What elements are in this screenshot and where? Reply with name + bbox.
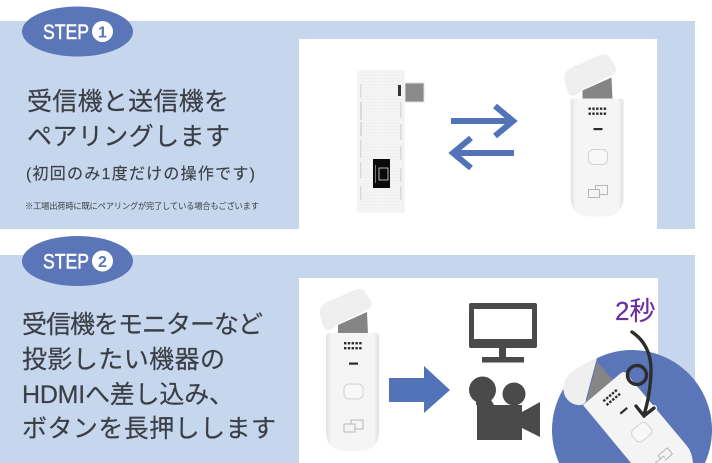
heading: step 1 — [27, 88, 230, 151]
panel: step 1 background — [0, 21, 695, 229]
callout: button press circle — [552, 350, 712, 463]
badge: step 1 — [22, 6, 133, 56]
icon: press arrow with loop — [628, 332, 654, 416]
icon: video camera — [469, 376, 540, 440]
arrows: two-way pairing — [451, 106, 514, 168]
badge: step 2: 2 — [98, 254, 107, 271]
badge: step 2 — [22, 236, 133, 286]
heading: step 1: ペアリングします — [27, 123, 230, 151]
heading: step 2 instructions — [22, 311, 276, 443]
label: 2 seconds: 2秒 — [615, 296, 655, 326]
badge: step 2: STEP — [43, 250, 89, 274]
arrow: to display devices — [389, 366, 450, 413]
device: transmitter step 2 — [320, 289, 379, 451]
heading: step 2 instructions: 投影したい機器の — [22, 346, 225, 374]
panel: step 2 background — [0, 255, 695, 463]
heading: step 2 instructions: ボタンを長押しします — [22, 415, 276, 443]
panel: step 1 white image area — [299, 39, 657, 229]
icon: monitor — [469, 303, 537, 362]
text: first-time note: (初回のみ1度だけの操作です) — [26, 165, 255, 183]
heading: step 1: 受信機と送信機を — [27, 88, 229, 116]
device: transmitter open cap — [564, 54, 624, 216]
device: tilted transmitter — [563, 358, 693, 463]
badge: step 1: 1 — [98, 24, 107, 42]
badge: step 1: STEP — [43, 21, 89, 44]
panel: step 2 white image area — [299, 278, 658, 463]
device: receiver side view — [357, 70, 424, 213]
text: factory pairing footnote: ※工場出荷時に既にペアリングが完了している場合もございます — [25, 201, 259, 211]
heading: step 2 instructions: 受信機をモニターなど — [22, 311, 263, 339]
heading: step 2 instructions: HDMIへ差し込み、 — [22, 381, 234, 409]
